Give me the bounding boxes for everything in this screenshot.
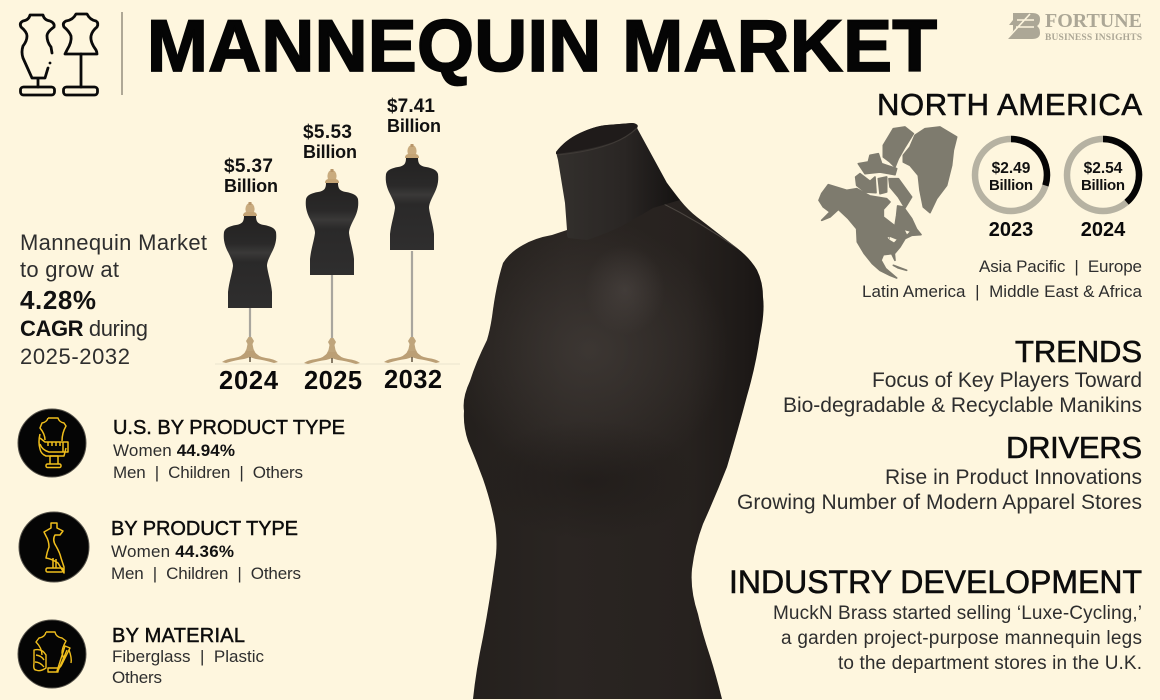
logo: Fortune Business Insights: FORTUNE	[1045, 10, 1142, 32]
text: by material	[112, 625, 264, 687]
mannequin 2032: $7.41	[387, 96, 435, 117]
text: by material: Others	[112, 668, 162, 687]
text: U.S. by product type: Women 44.94%	[113, 441, 235, 460]
panel: drivers: DRIVERS	[1006, 430, 1142, 465]
text: CAGR statement: 4.28%	[20, 285, 96, 315]
mannequin 2024: 2024	[219, 367, 279, 395]
icon: mannequin outlines	[20, 14, 98, 95]
text: by product type: BY PRODUCT TYPE	[111, 518, 298, 540]
donut: 2023: 2023	[989, 219, 1033, 241]
panel: trends: Focus of Key Players Toward	[872, 369, 1142, 392]
heading: North America: NORTH AMERICA	[877, 87, 1142, 122]
chart: mannequin height market size by year	[215, 96, 460, 395]
text: by material: BY MATERIAL	[112, 625, 245, 647]
icon: dress form	[19, 512, 89, 582]
donut: 2024	[1067, 139, 1139, 241]
mannequin 2032	[384, 96, 442, 394]
panel: drivers: Rise in Product Innovations	[885, 466, 1142, 489]
text: U.S. by product type	[113, 417, 345, 482]
panel: industry development: MuckN Brass started selling ‘Luxe-Cycling,’	[773, 603, 1142, 624]
text: CAGR statement	[20, 230, 207, 369]
mannequin 2025	[303, 122, 362, 395]
panel: industry development: to the department stores in the U.K.	[838, 653, 1142, 674]
title: MANNEQUIN MARKET	[147, 6, 937, 87]
mannequin 2025: Billion	[303, 142, 357, 162]
mannequin 2032: 2032	[384, 366, 442, 394]
map: North America	[819, 127, 957, 278]
text: U.S. by product type: Men | Children | Others	[113, 463, 303, 482]
text: by product type: Men | Children | Others	[111, 564, 301, 583]
divider	[121, 12, 123, 95]
mannequin 2024	[219, 156, 279, 395]
text: by product type: Women 44.36%	[111, 542, 234, 561]
text: other regions: Latin America | Middle East & Africa	[862, 282, 1143, 301]
donut: 2023	[975, 139, 1047, 241]
panel: drivers: Growing Number of Modern Apparel Stores	[737, 491, 1142, 514]
panel: drivers	[737, 430, 1142, 514]
donut: 2024: 2024	[1081, 219, 1126, 241]
panel: industry development: a garden project-purpose mannequin legs	[781, 628, 1142, 649]
panel: U.S. by product type	[18, 409, 345, 482]
panel: industry development: INDUSTRY DEVELOPMENT	[729, 564, 1142, 600]
panel: trends	[783, 334, 1142, 417]
text: U.S. by product type: U.S. BY PRODUCT TYPE	[113, 417, 345, 439]
logo: Fortune Business Insights: BUSINESS INSIGHTS	[1045, 33, 1142, 43]
mannequin 2032: Billion	[387, 116, 441, 136]
text: CAGR statement: CAGR during	[20, 316, 148, 341]
text: CAGR statement: Mannequin Market	[20, 230, 207, 255]
icon: mannequin with yarn and needle	[18, 620, 86, 688]
text: CAGR statement: 2025-2032	[20, 344, 130, 369]
panel: trends: Bio-degradable & Recyclable Manikins	[783, 394, 1142, 417]
mannequin 2025: 2025	[304, 367, 362, 395]
panel: industry development	[729, 564, 1142, 674]
logo: Fortune Business Insights	[1007, 10, 1142, 43]
donut: 2024: $2.54	[1084, 160, 1123, 177]
donut: 2024: Billion	[1081, 177, 1125, 194]
icon: mannequin with tape	[18, 409, 86, 477]
panel: by product type	[19, 512, 301, 583]
text: CAGR statement: to grow at	[20, 257, 119, 282]
text: by product type	[111, 518, 301, 583]
text: by material: Fiberglass | Plastic	[112, 647, 264, 666]
text: other regions: Asia Pacific | Europe	[979, 257, 1142, 276]
mannequin 2024: $5.37	[224, 156, 273, 177]
donut: 2023: $2.49	[992, 160, 1031, 177]
large mannequin torso	[450, 123, 780, 700]
panel: by material	[18, 620, 264, 688]
mannequin 2025: $5.53	[303, 122, 352, 143]
panel: trends: TRENDS	[1015, 334, 1142, 369]
text: other regions	[862, 257, 1143, 301]
mannequin 2024: Billion	[224, 176, 278, 196]
donut: 2023: Billion	[989, 177, 1033, 194]
